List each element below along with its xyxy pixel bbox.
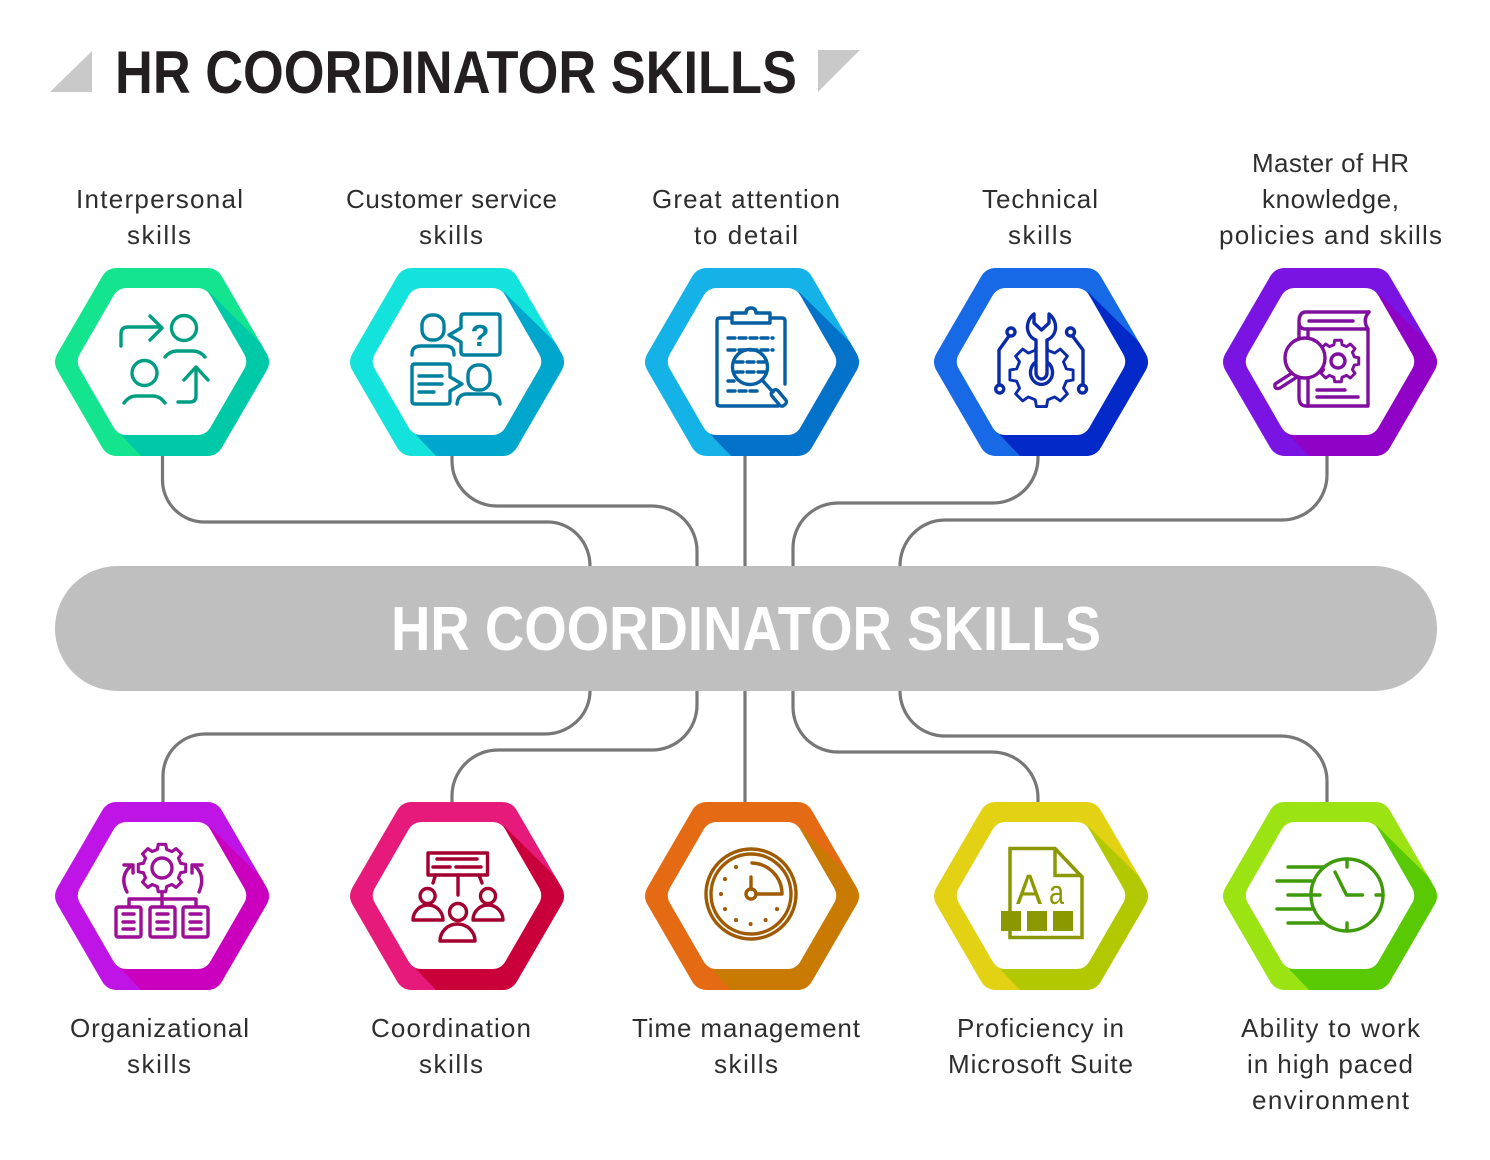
connector: microsoft suite <box>793 691 1038 802</box>
label: Great attention <box>652 184 840 214</box>
skill: customer service <box>346 184 569 458</box>
hexagon badge <box>55 802 274 992</box>
icon: people exchanging <box>121 316 208 403</box>
pill heading: HR COORDINATOR SKILLS <box>391 595 1101 664</box>
central pill <box>55 566 1437 691</box>
pill shape <box>55 566 1437 691</box>
hexagon badge <box>645 802 864 992</box>
label: Interpersonal <box>76 184 243 214</box>
connector: interpersonal <box>162 456 590 566</box>
label: to detail <box>694 220 798 250</box>
label <box>982 184 1098 250</box>
hexagon badge <box>934 268 1153 458</box>
hexagon badge <box>350 268 569 458</box>
skill: microsoft suite <box>934 802 1153 1079</box>
connector: HR knowledge <box>900 456 1327 566</box>
label <box>1241 1013 1421 1115</box>
skill: organizational <box>55 802 274 1079</box>
title heading: HR COORDINATOR SKILLS <box>115 39 797 106</box>
label: skills <box>1008 220 1072 250</box>
icon: customer conversation <box>412 314 500 404</box>
icon: book, gear and magnifier <box>1275 312 1369 406</box>
label <box>652 184 840 250</box>
skill: high paced <box>1223 802 1442 1115</box>
hexagon badge <box>934 802 1153 992</box>
icon: clock <box>706 849 796 939</box>
label: Coordination <box>371 1013 531 1043</box>
label: skills <box>127 220 191 250</box>
connector: organizational <box>163 691 590 802</box>
skill: coordination <box>350 802 569 1079</box>
icon: team and board <box>413 853 503 941</box>
label: Time management <box>632 1013 861 1043</box>
icon: clipboard and magnifier <box>717 308 788 407</box>
hexagon badge <box>55 268 274 458</box>
skill: technical <box>934 184 1153 458</box>
label: skills <box>714 1049 778 1079</box>
label: Ability to work <box>1241 1013 1421 1043</box>
label: Technical <box>982 184 1098 214</box>
icon: wrench and gear <box>996 314 1086 407</box>
title right triangle <box>818 50 860 92</box>
icon: customer conversation: ? <box>471 318 489 353</box>
skill: interpersonal <box>55 184 274 458</box>
connector: high paced <box>900 691 1327 802</box>
skill: time management <box>632 802 864 1079</box>
hexagon badge <box>645 268 864 458</box>
label: skills <box>419 1049 483 1079</box>
label: Master of HR <box>1252 148 1409 178</box>
connector: attention to detail <box>743 456 747 566</box>
label: Microsoft Suite <box>948 1049 1133 1079</box>
icon: document with type <box>1001 848 1082 938</box>
icon: fast clock <box>1277 859 1383 931</box>
label: in high paced <box>1247 1049 1413 1079</box>
label <box>632 1013 861 1079</box>
connector: coordination <box>452 691 697 802</box>
connector: customer service <box>452 456 697 566</box>
skill: attention to detail <box>645 184 864 458</box>
skill: HR knowledge <box>1219 148 1442 458</box>
title banner <box>50 39 860 106</box>
label <box>346 184 557 250</box>
label <box>70 1013 249 1079</box>
hexagon badge <box>350 802 569 992</box>
icon: gear and documents <box>116 844 208 937</box>
icon: document with type: a <box>1049 874 1064 912</box>
label: skills <box>419 220 483 250</box>
icon: document with type: A <box>1016 866 1042 914</box>
hexagon badge <box>1223 268 1442 458</box>
connector: time management <box>743 691 747 802</box>
title left triangle <box>50 51 92 92</box>
label <box>371 1013 531 1079</box>
connector: technical <box>793 456 1038 566</box>
label: environment <box>1252 1085 1410 1115</box>
label: Customer service <box>346 184 557 214</box>
label <box>948 1013 1133 1079</box>
hexagon badge <box>1223 802 1442 992</box>
label <box>1219 148 1442 250</box>
label: Proficiency in <box>957 1013 1124 1043</box>
label: skills <box>127 1049 191 1079</box>
label: Organizational <box>70 1013 249 1043</box>
label <box>76 184 243 250</box>
label: knowledge, <box>1262 184 1399 214</box>
label: policies and skills <box>1219 220 1442 250</box>
